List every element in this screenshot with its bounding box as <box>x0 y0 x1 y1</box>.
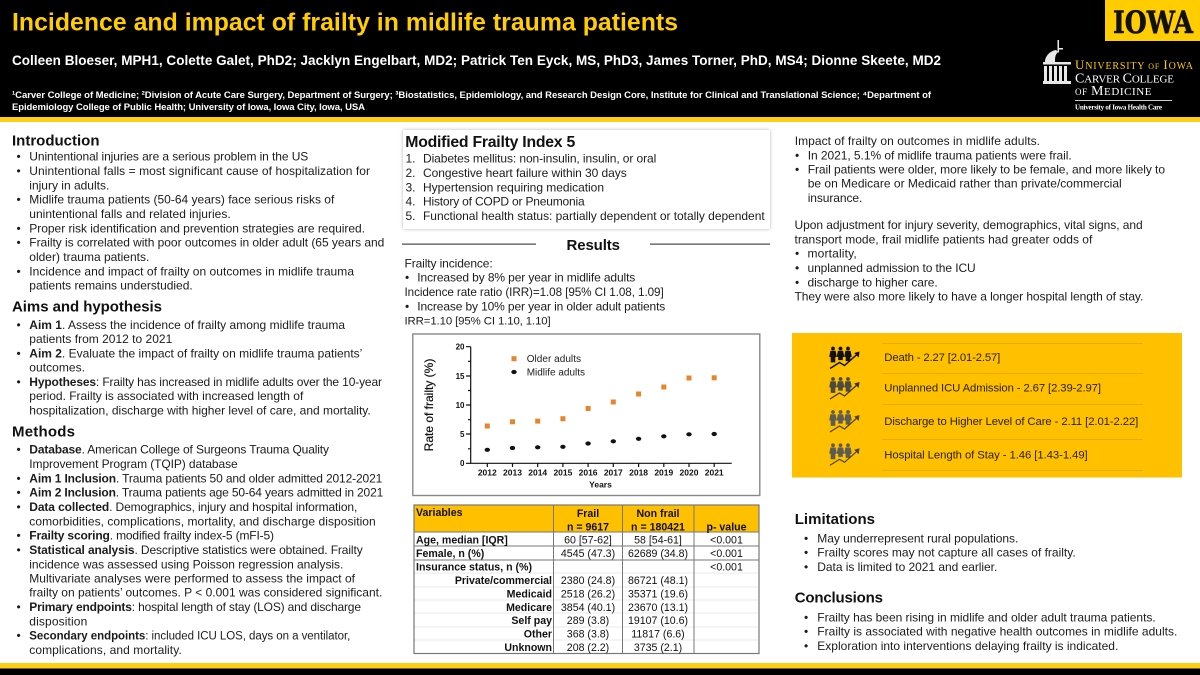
icon: Old Capitol dome <box>1043 40 1071 84</box>
text: introduction bullets: • <box>16 193 21 207</box>
footer band <box>0 663 1200 675</box>
non frail column: 58 [54-61] <box>634 534 682 546</box>
heading: Results: Results <box>566 237 620 254</box>
text: adjusted outcomes: • <box>795 247 799 261</box>
frail column: 208 (2.2) <box>567 642 609 654</box>
legend: Older adults <box>527 354 581 365</box>
logo: University of Iowa Carver College of Medicine: University of Iowa Health Care <box>1075 103 1162 111</box>
text: aims bullets: Aim 1. Assess the incidence of frailty among midlife trauma <box>29 318 345 332</box>
frail column: 3854 (40.1) <box>561 602 615 614</box>
header band <box>0 0 1200 122</box>
text: frailty incidence: • <box>405 299 409 313</box>
text: conclusions bullets: Frailty is associated with negative health outcomes in midlife adults. <box>817 625 1177 639</box>
text: methods bullets: Primary endpoints: hospital length of stay (LOS) and discharge <box>29 600 361 614</box>
frail column: 2380 (24.8) <box>561 575 615 587</box>
list: frailty criteria: Diabetes mellitus: non-insulin, insulin, or oral <box>423 152 656 166</box>
x axis labels: 2021 <box>705 468 724 478</box>
text: introduction bullets: • <box>16 164 21 178</box>
text: introduction bullets: • <box>16 221 21 235</box>
text: methods bullets: Data collected. Demographics, injury and hospital information, <box>29 500 357 514</box>
text: introduction bullets <box>16 150 384 293</box>
affiliations: Epidemiology College of Public Health; University of Iowa, Iowa City, Iowa, USA <box>12 102 365 113</box>
text: methods bullets: • <box>16 600 21 614</box>
row labels: Other <box>524 628 552 640</box>
table header: p- value <box>706 522 747 534</box>
non frail column: 23670 (13.1) <box>628 602 688 614</box>
table header <box>416 507 747 534</box>
icon: people trend <box>829 347 860 368</box>
text: methods bullets: frailty on patients’ outcomes. P < 0.001 was considered significant. <box>29 586 382 600</box>
list: frailty criteria: Hypertension requiring medication <box>423 180 604 194</box>
list: frailty criteria: Congestive heart failure within 30 days <box>423 166 627 180</box>
row labels <box>416 534 552 654</box>
text: frailty incidence: Incidence rate ratio (IRR)=1.08 [95% CI 1.08, 1.09] <box>404 286 664 299</box>
text: impact of frailty: • <box>795 163 799 177</box>
text: methods bullets: Frailty scoring. modified frailty index-5 (mFI-5) <box>29 529 274 543</box>
text: aims bullets: Hypotheses: Frailty has increased in midlife adults over the 10-year <box>29 375 382 389</box>
icon: people trend <box>829 443 860 465</box>
x axis labels: 2020 <box>680 468 699 478</box>
text: introduction bullets: • <box>16 264 21 278</box>
text: methods bullets: • <box>16 486 21 500</box>
x axis labels: 2017 <box>604 468 623 478</box>
row labels: Medicare <box>506 602 552 614</box>
text: aims bullets: patients from 2012 to 2021 <box>29 332 173 346</box>
y axis title: Rate of frailty (%) <box>422 359 436 451</box>
table: patient characteristics <box>414 505 759 654</box>
text: introduction bullets: Midlife trauma patients (50-64 years) face serious risks of <box>29 193 335 207</box>
text: methods bullets: Secondary endpoints: included ICU LOS, days on a ventilator, <box>29 631 350 643</box>
text: methods bullets: • <box>16 629 21 643</box>
x axis labels: 2015 <box>553 468 573 478</box>
list: frailty criteria: 1. <box>406 152 416 166</box>
text: adjusted outcomes: They were also more likely to have a longer hospital length of stay. <box>794 289 1143 303</box>
frail column: 2518 (26.2) <box>561 588 615 600</box>
row labels: Unknown <box>504 642 552 654</box>
series: older adults <box>485 375 717 428</box>
text: impact of frailty: In 2021, 5.1% of midlife trauma patients were frail. <box>808 148 1072 162</box>
text: introduction bullets: injury in adults. <box>29 178 109 192</box>
y axis labels: 10 <box>456 401 465 410</box>
logo: University of Iowa Carver College of Medicine: CARVER COLLEGE <box>1075 72 1174 86</box>
y axis labels <box>456 343 465 468</box>
text: introduction bullets: unintentional falls and related injuries. <box>29 207 231 221</box>
table header: Variables <box>416 507 463 519</box>
text: limitations bullets <box>804 531 1076 574</box>
list: frailty criteria: 2. <box>406 166 416 180</box>
x axis labels: 2018 <box>629 468 648 478</box>
icon: people trend <box>829 410 860 432</box>
list: frailty criteria: 5. <box>406 209 416 223</box>
heading: Methods: Methods <box>12 424 75 441</box>
text: methods bullets: Statistical analysis. Descriptive statistics were obtained. Frailty <box>29 543 363 557</box>
icon: people trend <box>829 377 860 399</box>
list: frailty criteria <box>406 152 765 223</box>
series: midlife adults <box>485 432 717 452</box>
text: methods bullets: • <box>16 471 21 485</box>
text: introduction bullets: • <box>16 236 21 250</box>
title: Incidence and impact of frailty in midlife trauma patients <box>12 10 678 36</box>
list: frailty criteria: 3. <box>406 180 416 194</box>
heading: Aims and hypothesis: Aims and hypothesis <box>12 299 162 316</box>
text: impact of frailty: Impact of frailty on outcomes in midlife adults. <box>795 134 1040 148</box>
y axis labels: 20 <box>456 343 465 352</box>
text: introduction bullets: Incidence and impact of frailty on outcomes in midlife trauma <box>29 264 354 278</box>
text: aims bullets: hospitalization, discharge with higher level of care, and mortality. <box>29 403 371 417</box>
text: introduction bullets: Proper risk identification and prevention strategies are required. <box>29 221 365 235</box>
x axis labels: 2019 <box>654 468 674 478</box>
text: aims bullets: outcomes. <box>29 361 85 375</box>
p-value column: <0.001 <box>710 548 743 560</box>
text: methods bullets: • <box>16 529 21 543</box>
non frail column: 19107 (10.6) <box>628 615 688 627</box>
logo: University of Iowa Carver College of Medicine: OF MEDICINE <box>1075 84 1152 99</box>
non frail column: 62689 (34.8) <box>628 548 688 560</box>
text: limitations bullets: • <box>804 546 808 560</box>
text: impact of frailty: • <box>795 148 799 162</box>
text: impact of frailty: be on Medicare or Medicaid rather than private/commercial <box>808 177 1122 191</box>
p-value column: <0.001 <box>710 534 743 546</box>
text: introduction bullets: Unintentional injuries are a serious problem in the US <box>29 150 308 164</box>
text: impact of frailty <box>795 134 1165 205</box>
text: methods bullets: Aim 2 Inclusion. Trauma patients age 50-64 years admitted in 2021 <box>29 486 384 500</box>
x axis labels: 2016 <box>579 468 598 478</box>
frail column: 4545 (47.3) <box>561 548 615 560</box>
row labels: Private/commercial <box>455 575 552 587</box>
text: methods bullets: comorbidities, complications, mortality, and discharge disposition <box>29 514 376 528</box>
panel: Modified Frailty Index 5 <box>403 130 770 229</box>
frail column: 368 (3.8) <box>567 628 609 640</box>
panel: left column <box>12 133 384 657</box>
text: conclusions bullets: • <box>804 639 808 653</box>
text: aims bullets: • <box>16 346 21 360</box>
legend: Midlife adults <box>527 368 585 378</box>
text: adjusted outcomes: • <box>795 275 799 289</box>
text: methods bullets: incidence was assessed using Poisson regression analysis. <box>29 557 343 571</box>
text: introduction bullets: • <box>16 150 21 164</box>
text: methods bullets: Aim 1 Inclusion. Trauma patients 50 and older admitted 2012-2021 <box>29 471 383 485</box>
text: limitations bullets: Data is limited to 2021 and earlier. <box>817 560 997 574</box>
text: hospital length of stay: Hospital Length of Stay - 1.46 [1.43-1.49] <box>884 449 1088 461</box>
x axis labels: Years <box>589 480 612 490</box>
text: conclusions bullets: Exploration into interventions delaying frailty is indicated. <box>817 639 1118 653</box>
non frail column: 11817 (6.6) <box>631 628 685 640</box>
text: conclusions bullets: • <box>804 611 808 625</box>
text: introduction bullets: Frailty is correlated with poor outcomes in older adult (65 years and <box>29 236 384 250</box>
x axis labels <box>478 468 724 490</box>
text: aims bullets: period. Frailty is associated with increased length of <box>29 389 304 403</box>
text: frailty incidence: Increased by 8% per year in midlife adults <box>417 271 635 285</box>
text: adjusted outcomes: transport mode, frail midlife patients had greater odds of <box>794 232 1093 246</box>
text: aims bullets <box>16 318 382 417</box>
logo: University of Iowa Carver College of Medicine <box>1043 40 1194 111</box>
non frail column: 86721 (48.1) <box>628 575 688 587</box>
text: frailty incidence: • <box>405 271 409 285</box>
text: conclusions bullets: Frailty has been rising in midlife and older adult trauma patients. <box>817 611 1156 625</box>
text: frailty incidence: Increase by 10% per year in older adult patients <box>417 299 665 313</box>
y axis labels: 0 <box>460 459 465 468</box>
text: introduction bullets: older) trauma patients. <box>29 250 149 264</box>
x axis labels: 2012 <box>478 468 497 478</box>
row labels: Age, median [IQR] <box>416 534 508 546</box>
table header: n = 9617 <box>567 522 609 534</box>
heading: Introduction: Introduction <box>12 133 100 150</box>
text: impact of frailty: Frail patients were older, more likely to be female, and more likely to <box>808 163 1165 177</box>
x axis labels: 2013 <box>503 468 522 478</box>
text: methods bullets: complications, and mortality. <box>29 643 182 657</box>
text: introduction bullets: patients remains understudied. <box>29 279 193 293</box>
row labels: Medicaid <box>507 588 552 600</box>
text: death: Death - 2.27 [2.01-2.57] <box>884 352 1000 364</box>
text: frailty incidence: Frailty incidence: <box>404 256 493 270</box>
text: aims bullets: • <box>16 375 21 389</box>
text: aims bullets: • <box>16 318 21 332</box>
list: frailty criteria: History of COPD or Pneumonia <box>423 195 585 209</box>
heading: Modified Frailty Index 5: Modified Frailty Index 5 <box>405 134 576 151</box>
x axis labels: 2014 <box>528 468 547 478</box>
authors: Colleen Bloeser, MPH1, Colette Galet, PhD2; Jacklyn Engelbart, MD2; Patrick Ten Eyck, MS, PhD3, James Torner, PhD, MS4; Dionne Skeete, MD2 <box>12 53 941 68</box>
row labels: Insurance status, n (%) <box>416 562 532 574</box>
affiliations <box>12 90 932 113</box>
text: adjusted outcomes: discharge to higher care. <box>808 275 938 289</box>
text: conclusions bullets: • <box>804 625 808 639</box>
y axis labels: 15 <box>456 372 465 381</box>
text: limitations bullets: May underrepresent rural populations. <box>817 531 1018 545</box>
text: methods bullets: • <box>16 443 21 457</box>
table header: Frail <box>577 508 599 520</box>
row labels: Self pay <box>511 615 552 627</box>
text: limitations bullets: • <box>804 531 808 545</box>
heading: Conclusions: Conclusions <box>795 589 883 606</box>
axes <box>466 347 732 467</box>
non frail column: 35371 (19.6) <box>628 588 688 600</box>
text: methods bullets: Improvement Program (TQIP) database <box>29 457 238 471</box>
non frail column: 3735 (2.1) <box>634 642 682 654</box>
text: unplanned ICU admission: Unplanned ICU Admission - 2.67 [2.39-2.97] <box>884 383 1101 395</box>
text: limitations bullets: Frailty scores may not capture all cases of frailty. <box>817 546 1076 560</box>
text: adjusted outcomes: • <box>795 261 799 275</box>
text: limitations bullets: • <box>804 560 808 574</box>
text: discharge to higher level of care: Discharge to Higher Level of Care - 2.11 [2.01-2.22] <box>884 416 1138 428</box>
text: impact of frailty: insurance. <box>808 191 862 205</box>
text: methods bullets: disposition <box>29 614 87 628</box>
text: adjusted outcomes: unplanned admission to the ICU <box>808 261 976 275</box>
text: methods bullets <box>16 443 384 657</box>
legend <box>511 354 585 378</box>
affiliations: ¹Carver College of Medicine; ²Division of Acute Care Surgery, Department of Surgery; ³Biostatistics, Epidemiology, and Research Design Core, Institute for Clinical and Translational Science; ⁴Department of <box>12 90 932 101</box>
list: frailty criteria: 4. <box>406 195 416 209</box>
text: adjusted outcomes <box>794 218 1143 303</box>
non frail column <box>628 534 688 654</box>
row labels: Female, n (%) <box>416 548 484 560</box>
text: methods bullets: Multivariate analyses were performed to assess the impact of <box>29 571 356 585</box>
text: methods bullets: • <box>16 543 21 557</box>
logo: University of Iowa Carver College of Medicine: UNIVERSITY OF IOWA <box>1075 57 1194 72</box>
text: frailty incidence <box>404 256 665 327</box>
text: frailty incidence: IRR=1.10 [95% CI 1.10, 1.10] <box>404 315 551 327</box>
text: methods bullets: • <box>16 500 21 514</box>
frail column <box>561 534 615 654</box>
heading: Limitations: Limitations <box>795 511 875 528</box>
table header: Non frail <box>637 508 680 520</box>
text: methods bullets: Database. American College of Surgeons Trauma Quality <box>29 443 329 457</box>
panel: adjusted odds ratios <box>792 333 1182 478</box>
text: conclusions bullets <box>804 611 1177 653</box>
text: adjusted outcomes: mortality, <box>808 247 857 261</box>
table header: n = 180421 <box>631 522 685 534</box>
frail column: 289 (3.8) <box>567 615 609 627</box>
text: aims bullets: Aim 2. Evaluate the impact of frailty on midlife trauma patients’ <box>29 346 362 360</box>
chart: rate of frailty by year <box>413 334 760 496</box>
p-value column <box>710 534 743 574</box>
p-value column: <0.001 <box>710 562 743 574</box>
text: adjusted outcomes: Upon adjustment for injury severity, demographics, vital signs, and <box>794 218 1143 232</box>
list: frailty criteria: Functional health status: partially dependent or totally dependent <box>423 209 765 223</box>
text: introduction bullets: Unintentional falls = most significant cause of hospitalization for <box>29 164 370 178</box>
y axis labels: 5 <box>460 430 465 439</box>
frail column: 60 [57-62] <box>564 534 612 546</box>
